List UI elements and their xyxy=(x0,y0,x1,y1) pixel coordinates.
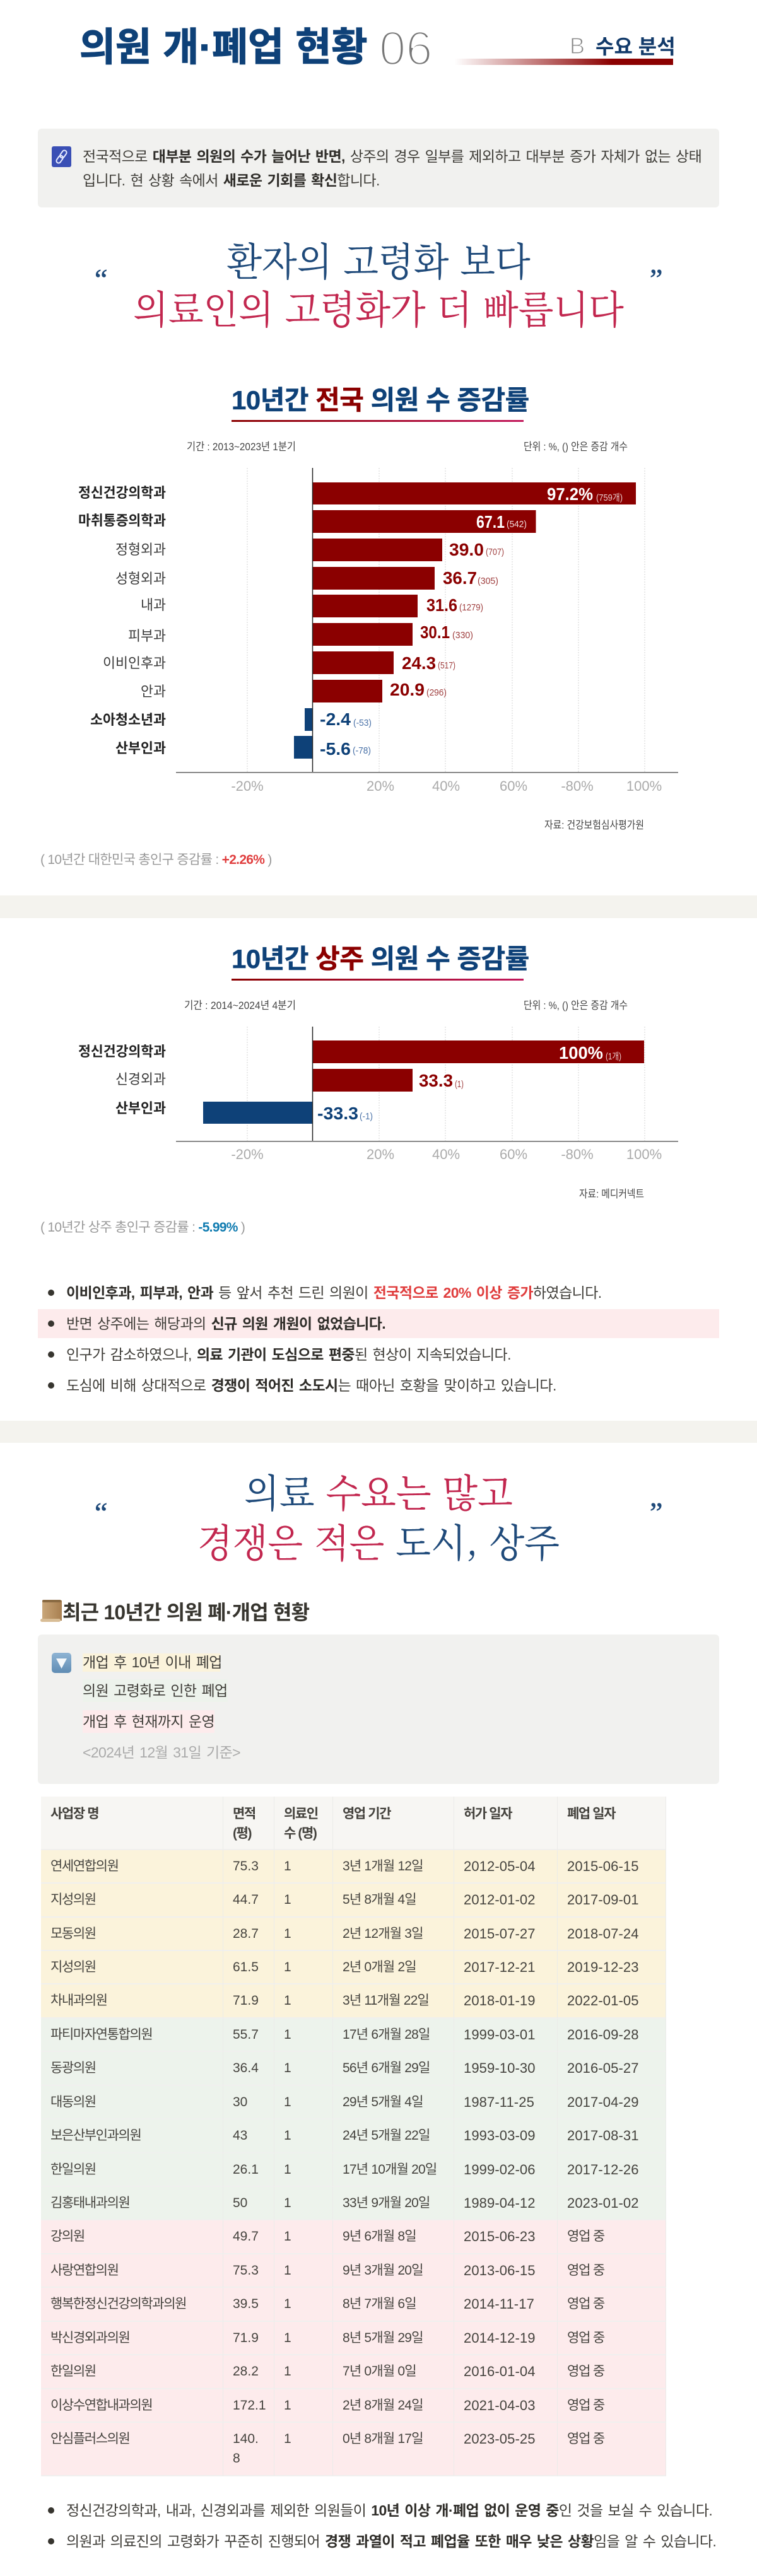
legend: closed within 10 years: 개업 후 10년 이내 폐업 xyxy=(83,1654,222,1670)
category labels: 소아청소년과 xyxy=(90,712,166,728)
panel: legend callout xyxy=(38,1635,719,1784)
table: clinic opening and closing: 1993-03-09 xyxy=(464,2128,536,2143)
table: clinic opening and closing: 1 xyxy=(284,2297,291,2311)
table: clinic opening and closing: 2년 0개월 2일 xyxy=(343,1960,416,1974)
axis tick labels chart 2: 40% xyxy=(432,1146,460,1162)
table: clinic opening and closing: 2014-11-17 xyxy=(464,2296,534,2312)
table: clinic opening and closing: 1 xyxy=(284,2095,291,2109)
table: clinic opening and closing: (평) xyxy=(233,1826,251,1841)
table: clinic opening and closing: 영업 기간 xyxy=(343,1807,390,1821)
table: clinic opening and closing: 의료인 xyxy=(284,1807,318,1821)
icon: down triangle button xyxy=(52,1653,71,1673)
bar chart: Sangju clinic change xyxy=(78,1000,678,1142)
table: clinic opening and closing: 수 (명) xyxy=(284,1826,316,1841)
table: clinic opening and closing: 1999-03-01 xyxy=(464,2027,536,2043)
callout text line 2: 입니다. 현 상황 속에서 새로운 기회를 확신합니다. xyxy=(83,172,380,189)
table: clinic opening and closing: 파티마자연통합의원 xyxy=(50,2027,152,2042)
table: clinic opening and closing: 행복한정신건강의학과의원 xyxy=(50,2297,186,2311)
category labels: 정신건강의학과 xyxy=(78,485,166,501)
category labels: 내과 xyxy=(141,597,166,613)
category labels: 산부인과 xyxy=(115,740,166,756)
header gradient bar xyxy=(454,59,673,65)
table: clinic opening and closing: 1 xyxy=(284,1859,291,1874)
table: clinic opening and closing: 75.3 xyxy=(233,1859,259,1874)
chart 2 title underline xyxy=(232,979,524,981)
table: clinic opening and closing: 50 xyxy=(233,2196,247,2210)
table: clinic opening and closing: 36.4 xyxy=(233,2061,259,2075)
table: clinic opening and closing: 17년 10개월 20일 xyxy=(343,2162,437,2177)
table: clinic opening and closing: 61.5 xyxy=(233,1960,259,1974)
count labels: (-1) xyxy=(360,1111,373,1122)
value labels: -2.4 xyxy=(320,709,351,729)
table: clinic opening and closing: 5년 8개월 4일 xyxy=(343,1892,416,1907)
count labels: (305) xyxy=(478,576,498,586)
table: clinic opening and closing: 차내과의원 xyxy=(50,1993,107,2008)
bullet list: findings xyxy=(48,1285,602,1394)
axis tick labels chart 1 xyxy=(231,778,662,794)
axis tick labels chart 2: 60% xyxy=(500,1146,527,1162)
chart period note: 기간 : 2014~2024년 4분기 xyxy=(184,1000,296,1011)
value labels: -5.6 xyxy=(320,739,351,759)
table: clinic opening and closing: 56년 6개월 29일 xyxy=(343,2061,430,2075)
table: clinic opening and closing: 44.7 xyxy=(233,1892,259,1907)
category labels: 성형외과 xyxy=(115,571,166,586)
value labels: -33.3 xyxy=(317,1104,358,1123)
table: clinic opening and closing: 28.7 xyxy=(233,1926,259,1941)
table: clinic opening and closing: 대동의원 xyxy=(50,2095,96,2109)
value labels xyxy=(320,484,593,759)
quote 1 closing mark: ” xyxy=(650,263,662,295)
table: clinic opening and closing: 1 xyxy=(284,1993,291,2008)
table: clinic opening and closing: 2017-12-26 xyxy=(567,2162,639,2177)
section number 06: 06 xyxy=(379,22,433,76)
legend: reference date: <2024년 12월 31일 기준> xyxy=(83,1744,240,1761)
axis tick labels chart 1: 40% xyxy=(432,778,460,794)
table: clinic opening and closing: 영업 중 xyxy=(567,2297,604,2311)
category labels xyxy=(78,485,166,756)
table: clinic opening and closing: 이상수연합내과의원 xyxy=(50,2398,152,2413)
axis tick labels chart 2 xyxy=(231,1146,662,1162)
table: clinic opening and closing: 동광의원 xyxy=(50,2061,96,2075)
table: clinic opening and closing: 2017-08-31 xyxy=(567,2128,639,2143)
chart 2 source: 자료: 메디커넥트 xyxy=(579,1188,644,1200)
population note Sangju: ( 10년간 상주 총인구 증감률 : -5.99% ) xyxy=(40,1220,245,1235)
bullet list: conclusions xyxy=(48,2502,716,2550)
highlighted bullet background xyxy=(38,1309,719,1338)
category labels: 안과 xyxy=(141,684,166,699)
table: clinic opening and closing: 3년 11개월 22일 xyxy=(343,1993,429,2008)
count labels: (542) xyxy=(507,519,527,530)
table: clinic opening and closing: 강의원 xyxy=(50,2229,85,2244)
table: clinic opening and closing: 55.7 xyxy=(233,2027,259,2042)
category labels: 산부인과 xyxy=(115,1100,166,1116)
table: clinic opening and closing: 영업 중 xyxy=(567,2229,604,2244)
table: clinic opening and closing: 2022-01-05 xyxy=(567,1993,639,2008)
table: clinic opening and closing: 영업 중 xyxy=(567,2331,604,2345)
quote 2 closing mark: ” xyxy=(650,1496,662,1529)
table: clinic opening and closing: 2년 12개월 3일 xyxy=(343,1926,423,1941)
table: clinic opening and closing: 71.9 xyxy=(233,2331,259,2345)
value labels: 100% xyxy=(559,1043,603,1063)
table: clinic opening and closing: 1 xyxy=(284,2398,291,2413)
panel: intro callout xyxy=(38,129,719,207)
count labels: (1279) xyxy=(459,602,483,613)
count labels: (707) xyxy=(486,547,504,557)
divider band 2 xyxy=(0,1421,757,1443)
table: clinic opening and closing: 28.2 xyxy=(233,2364,259,2379)
table: clinic opening and closing: 1999-02-06 xyxy=(464,2162,536,2177)
quote 2 line 1: 의료 수요는 많고 xyxy=(244,1462,513,1518)
table: clinic opening and closing: 폐업 일자 xyxy=(567,1807,615,1821)
table: clinic opening and closing: 한일의원 xyxy=(50,2162,96,2177)
axis tick labels chart 1: 100% xyxy=(626,778,662,794)
table: clinic opening and closing: 2014-12-19 xyxy=(464,2330,536,2346)
table: clinic opening and closing: 71.9 xyxy=(233,1993,259,2008)
section heading: 최근 10년간 의원 폐·개업 현황 xyxy=(62,1601,309,1624)
table: clinic opening and closing: 영업 중 xyxy=(567,2432,604,2446)
axis tick labels chart 2: -20% xyxy=(231,1146,264,1162)
table: clinic opening and closing: 2016-09-28 xyxy=(567,2027,639,2043)
table: clinic opening and closing: 8년 7개월 6일 xyxy=(343,2297,416,2311)
table: clinic opening and closing: 1987-11-25 xyxy=(464,2094,534,2110)
count labels: (1) xyxy=(455,1079,464,1090)
bullet 4: 도심에 비해 상대적으로 경쟁이 적어진 소도시는 때아닌 호황을 맞이하고 있습니다. xyxy=(66,1377,556,1394)
bullet 1: 이비인후과, 피부과, 안과 등 앞서 추천 드린 의원이 전국적으로 20% 이상 증가하였습니다. xyxy=(66,1285,602,1301)
table: clinic opening and closing xyxy=(41,1797,666,2476)
table: clinic opening and closing: 2013-06-15 xyxy=(464,2263,536,2278)
axis tick labels chart 1: 20% xyxy=(367,778,394,794)
value labels: 30.1 xyxy=(420,622,450,642)
table: clinic opening and closing: 1989-04-12 xyxy=(464,2195,536,2211)
chart 2 title: 10년간 상주 의원 수 증감률 xyxy=(232,944,529,974)
table: clinic opening and closing: 2015-06-23 xyxy=(464,2229,536,2244)
value labels: 67.1 xyxy=(476,512,505,532)
table: clinic opening and closing: 김홍태내과의원 xyxy=(50,2196,129,2210)
count labels: (759개) xyxy=(596,492,623,503)
value labels: 36.7 xyxy=(443,568,477,588)
table: clinic opening and closing: 2023-05-25 xyxy=(464,2431,536,2447)
value labels: 20.9 xyxy=(390,680,425,699)
table: clinic opening and closing: 안심플러스의원 xyxy=(50,2432,129,2446)
table: clinic opening and closing: 7년 0개월 0일 xyxy=(343,2364,416,2379)
chart 1 title underline xyxy=(232,420,524,422)
quote 2 opening mark: “ xyxy=(95,1496,107,1529)
icon: link xyxy=(52,146,71,167)
table: clinic opening and closing: 2016-01-04 xyxy=(464,2363,536,2379)
table: clinic opening and closing: 모동의원 xyxy=(50,1926,96,1941)
count labels: (1개) xyxy=(606,1051,621,1062)
quote 2 line 2: 경쟁은 적은 도시, 상주 xyxy=(197,1512,560,1568)
category labels: 마취통증의학과 xyxy=(78,513,166,528)
value labels: 39.0 xyxy=(449,540,484,559)
table: clinic opening and closing: 8 xyxy=(233,2451,240,2466)
count labels: (330) xyxy=(452,630,473,641)
table: clinic opening and closing: 1 xyxy=(284,2027,291,2042)
table: clinic opening and closing: 3년 1개월 12일 xyxy=(343,1859,423,1874)
bars xyxy=(203,1040,644,1124)
table: clinic opening and closing: 2018-01-19 xyxy=(464,1993,536,2008)
chart period note: 기간 : 2013~2023년 1분기 xyxy=(187,441,296,453)
table: clinic opening and closing: 보은산부인과의원 xyxy=(50,2128,141,2143)
quote 1 opening mark: “ xyxy=(95,263,107,295)
table: clinic opening and closing: 24년 5개월 22일 xyxy=(343,2128,430,2143)
bar chart: national clinic change xyxy=(78,441,678,773)
table: clinic opening and closing: 2021-04-03 xyxy=(464,2398,536,2413)
axis tick labels chart 1: 60% xyxy=(500,778,527,794)
axis tick labels chart 2: 20% xyxy=(367,1146,394,1162)
value labels: 31.6 xyxy=(426,595,457,615)
table: clinic opening and closing: 75.3 xyxy=(233,2263,259,2278)
axis tick labels chart 2: -80% xyxy=(561,1146,594,1162)
chart unit note: 단위 : %, () 안은 증감 개수 xyxy=(524,441,628,453)
table: clinic opening and closing: 172.1 xyxy=(233,2398,266,2413)
table: clinic opening and closing: 한일의원 xyxy=(50,2364,96,2379)
table: clinic opening and closing: 영업 중 xyxy=(567,2263,604,2278)
table: clinic opening and closing: 2012-05-04 xyxy=(464,1858,536,1874)
chart unit note: 단위 : %, () 안은 증감 개수 xyxy=(524,1000,628,1011)
table: clinic opening and closing: 연세연합의원 xyxy=(50,1859,119,1874)
table: clinic opening and closing: 140. xyxy=(233,2432,259,2446)
table: clinic opening and closing: 1 xyxy=(284,2331,291,2345)
table: clinic opening and closing: 면적 xyxy=(233,1807,255,1821)
count labels xyxy=(360,1051,621,1122)
count labels xyxy=(353,492,623,756)
category labels xyxy=(78,1044,166,1116)
table: clinic opening and closing: 2012-01-02 xyxy=(464,1892,536,1908)
category labels: 신경외과 xyxy=(115,1071,166,1087)
count labels: (296) xyxy=(426,687,447,698)
table: clinic opening and closing: 8년 5개월 29일 xyxy=(343,2331,423,2345)
table: clinic opening and closing: 26.1 xyxy=(233,2162,259,2177)
quote 1 line 1: 환자의 고령화 보다 xyxy=(226,231,531,287)
table: clinic opening and closing: 1 xyxy=(284,2128,291,2143)
table: clinic opening and closing: 43 xyxy=(233,2128,247,2143)
table: clinic opening and closing: 39.5 xyxy=(233,2297,259,2311)
table: clinic opening and closing: 1 xyxy=(284,2364,291,2379)
legend: closed due to aging: 의원 고령화로 인한 폐업 xyxy=(83,1682,228,1699)
value labels: 97.2% xyxy=(547,484,593,504)
table: clinic opening and closing: 2015-06-15 xyxy=(567,1858,639,1874)
axis tick labels chart 1: -20% xyxy=(231,778,264,794)
table: clinic opening and closing: 1 xyxy=(284,1892,291,1907)
table: clinic opening and closing: 33년 9개월 20일 xyxy=(343,2196,430,2210)
table: clinic opening and closing: 17년 6개월 28일 xyxy=(343,2027,430,2042)
table: clinic opening and closing: 2년 8개월 24일 xyxy=(343,2398,423,2413)
table: clinic opening and closing: 2018-07-24 xyxy=(567,1926,639,1942)
table: clinic opening and closing: 1 xyxy=(284,2162,291,2177)
conclusion 1: 정신건강의학과, 내과, 신경외과를 제외한 의원들이 10년 이상 개·폐업 없이 운영 중인 것을 보실 수 있습니다. xyxy=(66,2502,712,2519)
header title: 의원 개·폐업 현황 xyxy=(79,26,367,69)
table: clinic opening and closing: 29년 5개월 4일 xyxy=(343,2095,423,2109)
axis tick labels chart 2: 100% xyxy=(626,1146,662,1162)
population note national: ( 10년간 대한민국 총인구 증감률 : +2.26% ) xyxy=(40,853,272,867)
conclusion 2: 의원과 의료진의 고령화가 꾸준히 진행되어 경쟁 과열이 적고 폐업율 또한 매우 낮은 상황임을 알 수 있습니다. xyxy=(66,2533,716,2550)
table: clinic opening and closing: 지성의원 xyxy=(50,1960,96,1974)
table: clinic opening and closing: 사랑연합의원 xyxy=(50,2263,119,2278)
table: clinic opening and closing: 9년 3개월 20일 xyxy=(343,2263,423,2278)
icon: scroll xyxy=(40,1600,62,1622)
value labels: 24.3 xyxy=(402,653,436,673)
legend: still operating: 개업 후 현재까지 운영 xyxy=(83,1713,214,1730)
table: clinic opening and closing: 1 xyxy=(284,2432,291,2446)
quote 1 line 2: 의료인의 고령화가 더 빠릅니다 xyxy=(133,279,624,335)
table: clinic opening and closing: 2016-05-27 xyxy=(567,2060,639,2076)
chart 1 title: 10년간 전국 의원 수 증감률 xyxy=(232,385,529,415)
divider band 1 xyxy=(0,895,757,918)
table: clinic opening and closing: 0년 8개월 17일 xyxy=(343,2432,423,2446)
value labels xyxy=(317,1043,603,1123)
count labels: (517) xyxy=(438,660,455,671)
table: clinic opening and closing: 2017-09-01 xyxy=(567,1892,639,1908)
table: clinic opening and closing: 박신경외과의원 xyxy=(50,2331,129,2345)
table: clinic opening and closing: 1959-10-30 xyxy=(464,2060,536,2076)
table: clinic opening and closing: 2015-07-27 xyxy=(464,1926,536,1942)
table: clinic opening and closing: 9년 6개월 8일 xyxy=(343,2229,416,2244)
bars xyxy=(294,482,636,759)
table: clinic opening and closing: 허가 일자 xyxy=(464,1807,512,1821)
count labels: (-78) xyxy=(353,745,371,756)
axis tick labels chart 1: -80% xyxy=(561,778,594,794)
table: clinic opening and closing: 30 xyxy=(233,2095,247,2109)
table: clinic opening and closing: 49.7 xyxy=(233,2229,259,2244)
table: clinic opening and closing: 영업 중 xyxy=(567,2364,604,2379)
table: clinic opening and closing: 2019-12-23 xyxy=(567,1959,639,1975)
category labels: 정형외과 xyxy=(115,542,166,557)
callout text line 1: 전국적으로 대부분 의원의 수가 늘어난 반면, 상주의 경우 일부를 제외하고 대부분 증가 자체가 없는 상태 xyxy=(83,148,701,165)
table: clinic opening and closing: 1 xyxy=(284,1960,291,1974)
category labels: 정신건강의학과 xyxy=(78,1044,166,1059)
table: clinic opening and closing: 2023-01-02 xyxy=(567,2195,639,2211)
table: clinic opening and closing: 1 xyxy=(284,2263,291,2278)
count labels: (-53) xyxy=(353,718,372,728)
bullet 3: 인구가 감소하였으나, 의료 기관이 도심으로 편중된 현상이 지속되었습니다. xyxy=(66,1346,511,1363)
section label: B 수요 분석: B 수요 분석 xyxy=(570,33,676,59)
table: clinic opening and closing: 사업장 명 xyxy=(50,1807,98,1821)
table: clinic opening and closing: 영업 중 xyxy=(567,2398,604,2413)
table: clinic opening and closing: 지성의원 xyxy=(50,1892,96,1907)
table: clinic opening and closing: 1 xyxy=(284,2229,291,2244)
value labels: 33.3 xyxy=(419,1071,453,1090)
category labels: 피부과 xyxy=(128,628,166,644)
category labels: 이비인후과 xyxy=(103,655,166,671)
table: clinic opening and closing: 1 xyxy=(284,2196,291,2210)
table: clinic opening and closing: 1 xyxy=(284,1926,291,1941)
table: clinic opening and closing: 2017-04-29 xyxy=(567,2094,639,2110)
table: clinic opening and closing: 2017-12-21 xyxy=(464,1959,536,1975)
bullet 2: 반면 상주에는 해당과의 신규 의원 개원이 없었습니다. xyxy=(66,1315,385,1332)
table: clinic opening and closing: 1 xyxy=(284,2061,291,2075)
